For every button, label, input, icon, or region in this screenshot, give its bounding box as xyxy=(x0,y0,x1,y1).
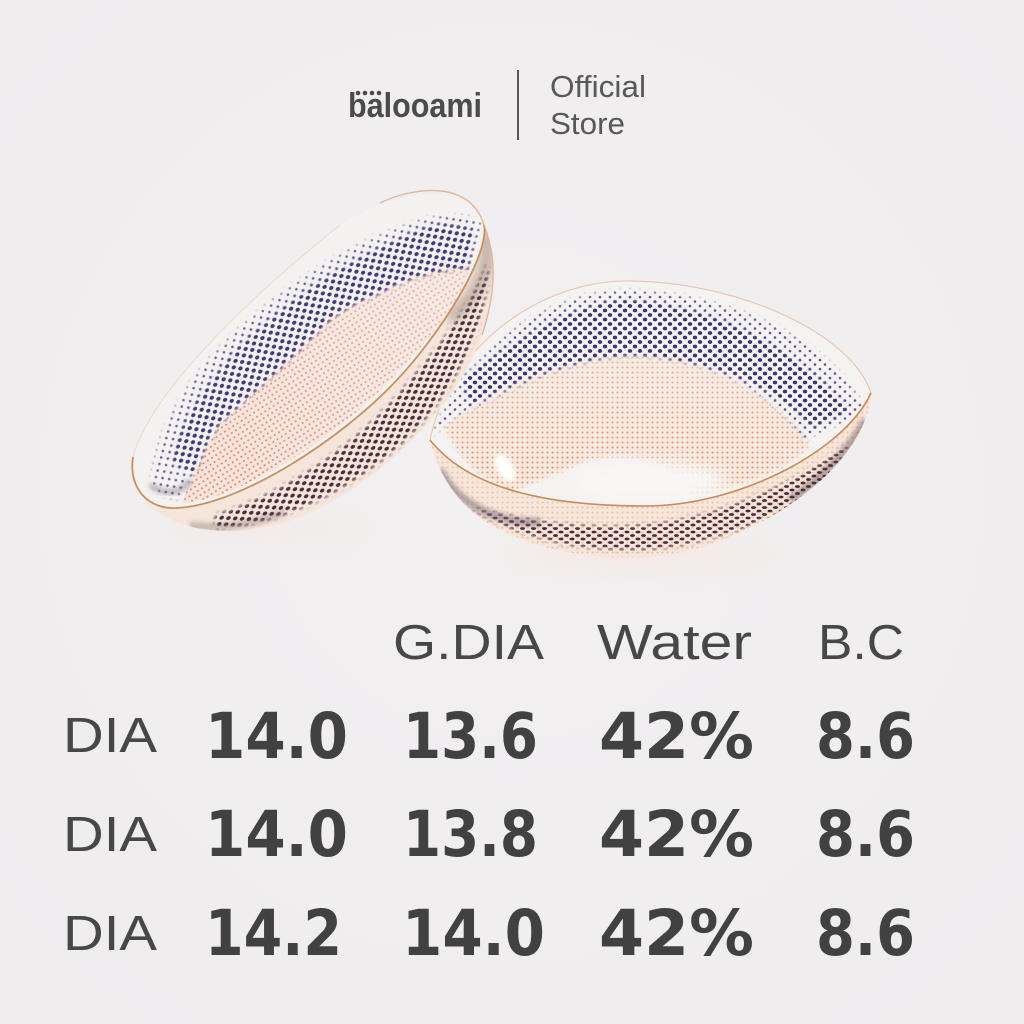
column headings: B.C xyxy=(818,616,904,670)
row 3: 8.6 xyxy=(816,897,915,970)
row 2: 14.0 xyxy=(205,798,348,871)
right lens lower bowl xyxy=(430,396,871,558)
right lens dot pattern xyxy=(434,287,864,494)
left lens lower bowl xyxy=(144,231,492,531)
soft peach shadow beneath lenses xyxy=(160,518,780,567)
left lens xyxy=(131,190,494,531)
store label: Store xyxy=(550,106,625,141)
column headings: Water xyxy=(597,616,752,670)
right lens xyxy=(420,280,880,570)
row 2: DIA xyxy=(63,808,157,862)
row 1: 13.6 xyxy=(403,700,538,773)
contact lens photo xyxy=(120,190,880,570)
spec table xyxy=(63,616,915,970)
left lens dot pattern xyxy=(148,212,482,503)
logo: balooami wordmark: balooami xyxy=(348,87,482,125)
right lens rim xyxy=(430,281,871,506)
row 1 xyxy=(63,700,915,773)
store label: Official xyxy=(550,69,646,104)
row 2 xyxy=(63,798,915,871)
row 3 xyxy=(63,897,915,970)
row 2: 8.6 xyxy=(816,798,915,871)
column headings xyxy=(393,616,904,670)
row 2: 42% xyxy=(599,798,754,871)
column headings: G.DIA xyxy=(393,616,544,670)
row 3: 14.2 xyxy=(205,897,342,970)
logo lockup xyxy=(348,69,646,141)
row 2: 13.8 xyxy=(403,798,538,871)
row 1: DIA xyxy=(63,709,157,763)
row 3: 14.0 xyxy=(402,897,545,970)
row 1: 42% xyxy=(599,700,754,773)
left lens rim xyxy=(132,191,493,508)
row 1: 8.6 xyxy=(816,700,915,773)
row 3: 42% xyxy=(599,897,754,970)
row 3: DIA xyxy=(63,907,157,961)
row 1: 14.0 xyxy=(205,700,348,773)
